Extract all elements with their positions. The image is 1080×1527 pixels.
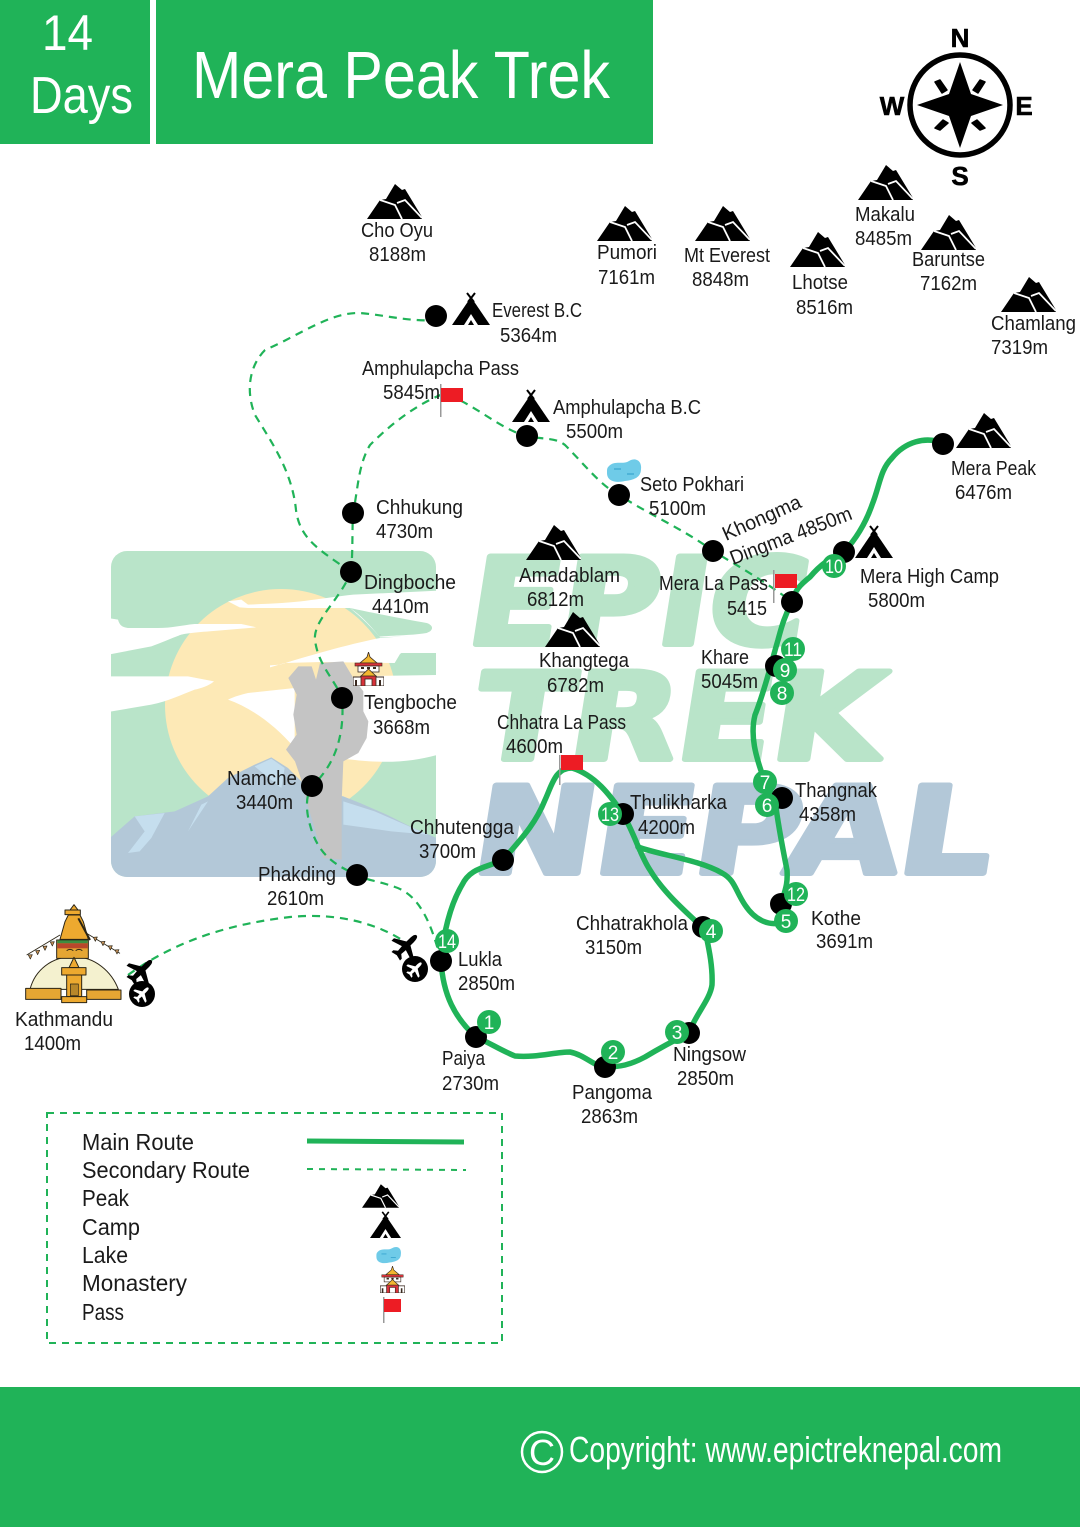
watermark logo background [108,534,1004,902]
place labels: Amphulapcha Pass [362,358,519,380]
place labels: Phakding [258,864,336,886]
place labels: Mera Peak [951,458,1037,480]
place labels: Lhotse [792,272,848,294]
place labels: Dingboche [364,572,456,594]
place labels: Chhatrakhola [576,913,689,935]
place labels: 5364m [500,325,557,347]
peak icons [367,165,1056,647]
legend panel [47,1113,502,1343]
place labels: 5800m [868,590,925,612]
main route (solid) [441,440,943,1067]
legend: lake icon [376,1247,401,1263]
place labels: Amadablam [519,565,620,587]
waypoint dots [301,305,954,1078]
place labels: Amphulapcha B.C [553,397,701,419]
place labels: Everest B.C [492,300,582,322]
day number badges: 14 [438,932,456,953]
place labels: 2730m [442,1073,499,1095]
place labels: 5100m [649,498,706,520]
compass rose [880,23,1033,191]
header: title: Mera Peak Trek [192,38,610,113]
day number badges: 1 [484,1013,494,1034]
footer band [0,1387,1080,1527]
logo square: sun, clouds and mountain [108,551,438,881]
legend panel: Pass [82,1299,124,1325]
legend panel: Secondary Route [82,1157,250,1183]
place labels: 4358m [799,804,856,826]
place labels: Mera High Camp [860,566,999,588]
compass rose: N [951,23,969,53]
place labels: 5500m [566,421,623,443]
day number badges: 8 [777,684,787,705]
copyright symbol: C [529,1432,555,1473]
legend panel: Lake [82,1242,128,1268]
day number badges: 6 [762,796,772,817]
legend: peak icon [362,1184,399,1208]
legend panel: Monastery [82,1270,187,1296]
copyright symbol [522,1432,562,1473]
place labels: 5045m [701,671,758,693]
place labels: Dingma 4850m [727,503,855,570]
place labels: Cho Oyu [361,220,433,242]
secondary route (dashed) [128,313,792,975]
place labels: 2863m [581,1106,638,1128]
header: days badge [0,0,150,144]
legend: pass flag icon [383,1297,401,1323]
day number badges: 5 [781,912,791,933]
icon: Amphulapcha Pass flag [440,384,463,417]
header: days badge: Days [30,67,133,125]
place labels: 2850m [458,973,515,995]
place labels: Thangnak [795,780,878,802]
place labels: Pangoma [572,1082,653,1104]
day number badges: 3 [672,1023,682,1044]
place labels: Kathmandu [15,1009,113,1031]
icon: Boudhanath stupa, Kathmandu [26,905,121,1003]
place labels: Tengboche [364,692,457,714]
place labels: Khare [701,647,749,669]
place labels: 8848m [692,269,749,291]
compass rose: S [951,161,969,191]
place labels: Thulikharka [630,792,728,814]
place labels: 4410m [372,596,429,618]
place labels: 1400m [24,1033,81,1055]
watermark word EPIC: EPIC [459,534,818,673]
place labels: 2610m [267,888,324,910]
place labels: Mera La Pass [659,573,768,595]
place labels: Chhukung [376,497,463,519]
day number badges: 12 [787,885,805,906]
place labels: Paiya [442,1048,486,1070]
place labels: 6782m [547,675,604,697]
legend panel: Camp [82,1214,140,1240]
place labels: Pumori [597,242,657,264]
place labels: 7319m [991,337,1048,359]
place labels [15,204,1076,1128]
place labels: 5845m [383,382,440,404]
watermark word TREK: TREK [465,649,899,788]
place labels: Baruntse [912,249,985,271]
day number badges: 7 [760,773,770,794]
icon: plane to Lukla [386,925,427,966]
legend: camp icon [370,1212,401,1238]
icon: Chhatra La Pass flag [559,755,583,785]
place labels: 8188m [369,244,426,266]
day number badges [435,554,846,1064]
place labels: 7162m [920,273,977,295]
day number badges: 11 [784,640,802,661]
place labels: 5415 [727,598,767,620]
place labels: Chamlang [991,313,1076,335]
place labels: Seto Pokhari [640,474,744,496]
icon: Seto Pokhari lake [607,459,641,482]
place labels: 7161m [598,267,655,289]
legend panel: Peak [82,1185,129,1211]
camp icons [452,293,893,558]
place labels: 8485m [855,228,912,250]
place labels: Kothe [811,908,861,930]
place labels: Lukla [458,949,503,971]
place labels: Namche [227,768,297,790]
day number badges: 2 [608,1043,618,1064]
place labels: 4600m [506,736,563,758]
place labels: 3691m [816,931,873,953]
place labels: 3150m [585,937,642,959]
place labels: Khangtega [539,650,630,672]
compass rose: W [880,91,905,121]
icon: flight badge at Kathmandu [129,981,155,1007]
place labels: 2850m [677,1068,734,1090]
place labels: 6812m [527,589,584,611]
place labels: 3700m [419,841,476,863]
legend: main route sample [307,1141,464,1142]
compass rose: E [1015,91,1033,121]
place labels: 8516m [796,297,853,319]
place labels: Chhatra La Pass [497,712,626,734]
watermark word NEPAL: NEPAL [464,763,1004,902]
day number badges: 10 [825,557,843,578]
legend: monastery icon [380,1266,405,1293]
day number badges: 4 [706,922,717,943]
place labels: 3668m [373,717,430,739]
icon: flight badge at Lukla [402,956,428,982]
place labels: 4730m [376,521,433,543]
place labels: Mt Everest [684,245,770,267]
icon: plane from Kathmandu [121,950,162,991]
day number badges: 9 [780,661,790,682]
place labels: 6476m [955,482,1012,504]
legend: secondary route sample [307,1169,466,1170]
header: title [156,0,653,144]
place labels: 3440m [236,792,293,814]
icon: Tengboche monastery [353,652,384,686]
place labels: Khongma [719,491,806,546]
place labels: 4200m [638,817,695,839]
place labels: Chhutengga [410,817,515,839]
header: days badge: 14 [42,5,93,61]
legend panel: Main Route [82,1129,194,1155]
day number badges: 13 [601,805,619,826]
icon: Mera La Pass flag [773,570,797,603]
place labels: Makalu [855,204,915,226]
place labels: Ningsow [673,1044,747,1066]
